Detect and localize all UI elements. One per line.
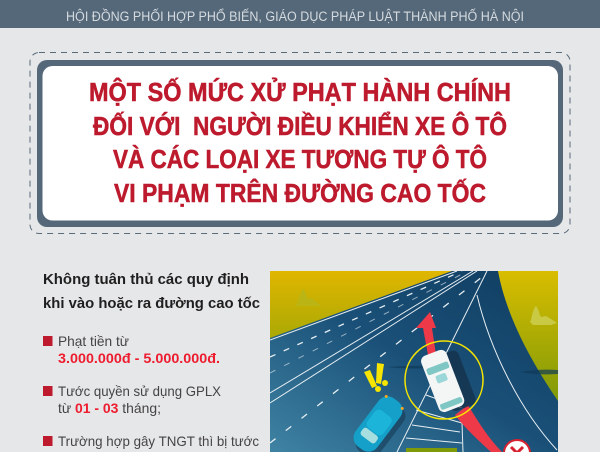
lane markings xyxy=(270,271,557,452)
penalty: fine: 3.000.000đ - 5.000.000đ. xyxy=(58,350,220,366)
title text: VI PHẠM TRÊN ĐƯỜNG CAO TỐC xyxy=(114,178,486,208)
wrong-way arrow xyxy=(416,312,436,355)
penalty: fine xyxy=(43,333,220,366)
penalty: fine: Phạt tiền từ xyxy=(58,333,129,349)
penalty: licence suspension xyxy=(43,383,222,416)
warning marks xyxy=(364,363,388,392)
title text: MỘT SỐ MỨC XỬ PHẠT HÀNH CHÍNH xyxy=(89,76,511,107)
title text: ĐỐI VỚI NGƯỜI ĐIỀU KHIỂN XE Ô TÔ xyxy=(93,111,507,141)
section heading: khi vào hoặc ra đường cao tốc xyxy=(43,295,260,312)
header band: HỘI ĐỒNG PHỐI HỢP PHỔ BIẾN, GIÁO DỤC PHÁP LUẬT THÀNH PHỐ HÀ NỘI xyxy=(66,9,524,24)
penalty: accident: Trường hợp gây TNGT thì bị tước xyxy=(58,433,259,449)
highlight ring xyxy=(405,341,483,419)
bushes xyxy=(296,289,558,374)
prohibited sign xyxy=(504,440,530,452)
section heading: Không tuân thủ các quy định xyxy=(43,271,249,288)
illustration: highway xyxy=(270,271,558,452)
penalty: licence suspension: Tước quyền sử dụng GPLX xyxy=(58,383,222,399)
road sign panel xyxy=(406,448,457,452)
right verge xyxy=(498,271,558,401)
blue car xyxy=(354,394,406,452)
title text xyxy=(89,76,511,208)
title text: VÀ CÁC LOẠI XE TƯƠNG TỰ Ô TÔ xyxy=(113,144,487,174)
section heading xyxy=(43,271,260,312)
header band xyxy=(0,0,600,28)
left verge xyxy=(270,271,452,338)
white car xyxy=(421,350,476,412)
title panel xyxy=(30,52,570,234)
penalty: licence suspension: từ 01 - 03 tháng; xyxy=(58,400,161,416)
